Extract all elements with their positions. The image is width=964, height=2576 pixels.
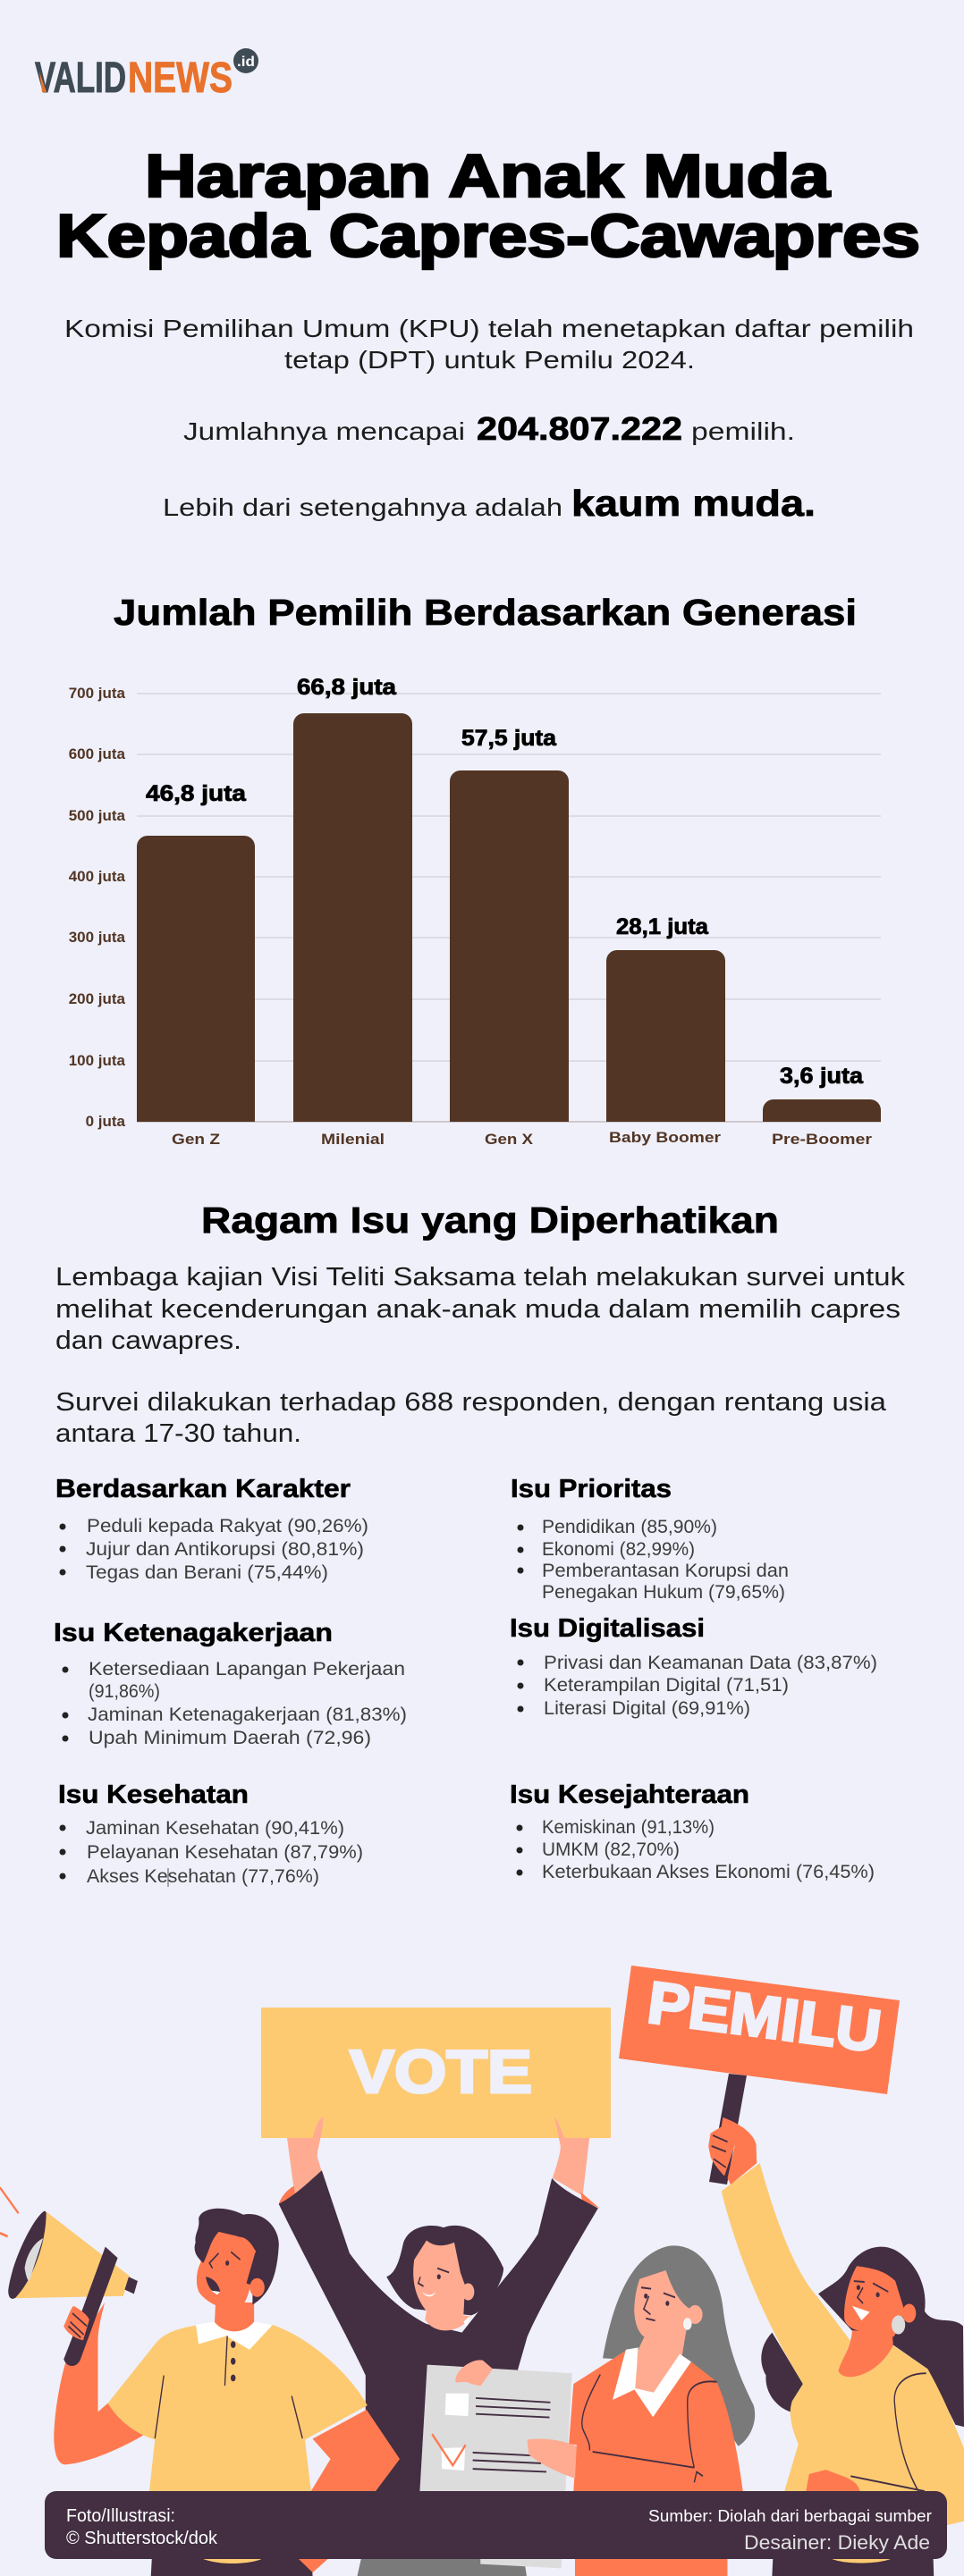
value labels: 57,5 juta <box>461 726 557 751</box>
illustration: people at election rally <box>0 1966 964 2576</box>
panel: berdasarkan karakter: Peduli kepada Rakyat (90,26%) <box>87 1516 368 1536</box>
heading: jumlah pemilih: Jumlah Pemilih Berdasarkan Generasi <box>114 592 857 633</box>
photo credit: © Shutterstock/dok <box>66 2529 218 2548</box>
logo: Validnews.id: .id <box>237 55 255 70</box>
photo credit: Foto/Illustrasi: <box>66 2506 175 2526</box>
panel: isu ketenagakerjaan: (91,86%) <box>89 1681 160 1702</box>
panel: berdasarkan karakter: Jujur dan Antikorupsi (80,81%) <box>86 1539 364 1560</box>
value labels <box>146 675 864 1089</box>
intro text block: Jumlahnya mencapai <box>183 417 465 445</box>
sign: VOTE <box>261 2008 611 2138</box>
survey description text: Survei dilakukan terhadap 688 responden, dengan rentang usia <box>55 1388 887 1417</box>
panel: isu kesejahteraan: Kemiskinan (91,13%) <box>542 1817 715 1838</box>
panel: isu kesejahteraan <box>510 1780 875 1882</box>
logo: Validnews.id: NEWS <box>128 55 233 102</box>
category labels: Pre-Boomer <box>772 1131 872 1148</box>
intro text block: pemilih. <box>691 417 795 445</box>
panel: isu prioritas: Pendidikan (85,90%) <box>542 1517 717 1537</box>
intro text block: tetap (DPT) untuk Pemilu 2024. <box>284 346 695 374</box>
intro text block <box>64 315 914 524</box>
y axis labels: 500 juta <box>69 807 126 824</box>
panel: isu prioritas: Penegakan Hukum (79,65%) <box>542 1582 785 1603</box>
source and designer credit: Desainer: Dieky Ade <box>744 2531 930 2554</box>
panel: berdasarkan karakter: Berdasarkan Karakter <box>55 1475 351 1503</box>
intro text block: 204.807.222 <box>477 410 682 447</box>
logo: Validnews.id: VALID <box>35 55 126 102</box>
source and designer credit <box>648 2507 932 2554</box>
y axis labels: 300 juta <box>69 929 126 946</box>
category labels: Milenial <box>321 1131 385 1148</box>
panel: isu digitalisasi: Privasi dan Keamanan Data (83,87%) <box>544 1653 877 1673</box>
panel: isu ketenagakerjaan: Isu Ketenagakerjaan <box>54 1619 333 1647</box>
intro text block: kaum muda. <box>571 483 816 524</box>
sign: VOTE: VOTE <box>350 2038 532 2106</box>
panel: isu kesehatan <box>58 1780 363 1887</box>
caption bar <box>45 2491 947 2559</box>
panel: isu ketenagakerjaan <box>54 1619 407 1748</box>
lower bodies below caption bar <box>151 2547 934 2576</box>
panel: isu kesehatan: Jaminan Kesehatan (90,41%) <box>86 1818 344 1839</box>
panel: isu ketenagakerjaan: Upah Minimum Daerah (72,96) <box>89 1728 371 1748</box>
bar chart: pemilih per generasi <box>69 675 881 1148</box>
y axis labels: 400 juta <box>69 868 126 885</box>
panel: isu kesejahteraan: Isu Kesejahteraan <box>510 1780 749 1809</box>
survey description text: melihat kecenderungan anak-anak muda dalam memilih capres <box>55 1295 901 1324</box>
survey description text: Lembaga kajian Visi Teliti Saksama telah melakukan survei untuk <box>55 1263 906 1292</box>
value labels: 46,8 juta <box>146 781 247 806</box>
intro text block: Komisi Pemilihan Umum (KPU) telah menetapkan daftar pemilih <box>64 315 914 342</box>
y axis labels: 100 juta <box>69 1052 126 1069</box>
panel: isu digitalisasi: Isu Digitalisasi <box>510 1614 705 1643</box>
panel: isu kesejahteraan: Keterbukaan Akses Ekonomi (76,45%) <box>542 1862 875 1882</box>
panel: isu prioritas: Pemberantasan Korupsi dan <box>542 1561 789 1581</box>
panel: isu kesehatan: Akses Kesehatan (77,76%) <box>87 1866 319 1887</box>
panel: isu digitalisasi: Keterampilan Digital (71,51) <box>544 1675 789 1696</box>
panel: isu digitalisasi: Literasi Digital (69,91%) <box>544 1698 750 1719</box>
intro text block: Lebih dari setengahnya adalah <box>163 493 562 521</box>
title <box>56 142 920 270</box>
sign: PEMILU <box>619 1966 900 2185</box>
y axis labels: 700 juta <box>69 685 126 702</box>
panel: isu kesejahteraan: UMKM (82,70%) <box>542 1839 680 1860</box>
panel: berdasarkan karakter: Tegas dan Berani (75,44%) <box>86 1562 328 1583</box>
y axis labels <box>69 685 126 1130</box>
y axis labels: 200 juta <box>69 990 126 1007</box>
panel: isu prioritas <box>511 1475 789 1603</box>
logo: Validnews.id <box>35 48 258 102</box>
title: Harapan Anak Muda <box>145 142 831 210</box>
panel: isu kesehatan: Isu Kesehatan <box>58 1780 249 1809</box>
panel: isu digitalisasi <box>510 1614 877 1719</box>
title: Kepada Capres-Cawapres <box>56 202 920 270</box>
survey description text <box>55 1263 906 1448</box>
sign: PEMILU: PEMILU <box>644 1968 885 2065</box>
person: woman with raised arm holding PEMILU sign <box>708 2117 964 2525</box>
bars <box>137 713 881 1122</box>
panel: isu prioritas: Isu Prioritas <box>511 1475 672 1503</box>
y axis labels: 600 juta <box>69 745 126 762</box>
panel: isu kesehatan: Pelayanan Kesehatan (87,79%) <box>87 1842 363 1863</box>
panel: berdasarkan karakter <box>55 1475 368 1583</box>
panel: isu ketenagakerjaan: Ketersediaan Lapangan Pekerjaan <box>89 1659 405 1679</box>
source and designer credit: Sumber: Diolah dari berbagai sumber <box>648 2507 932 2525</box>
panel: isu prioritas: Ekonomi (82,99%) <box>542 1539 695 1560</box>
person: woman with grey hair <box>528 2245 755 2491</box>
heading: ragam isu: Ragam Isu yang Diperhatikan <box>201 1200 779 1241</box>
category labels: Gen Z <box>172 1131 220 1148</box>
survey description text: dan cawapres. <box>55 1326 241 1355</box>
y axis labels: 0 juta <box>86 1113 126 1130</box>
photo credit <box>66 2506 218 2548</box>
category labels: Gen X <box>485 1131 534 1148</box>
category labels: Baby Boomer <box>609 1129 721 1146</box>
panel: isu ketenagakerjaan: Jaminan Ketenagakerjaan (81,83%) <box>88 1705 407 1725</box>
value labels: 3,6 juta <box>780 1064 864 1089</box>
survey description text: antara 17-30 tahun. <box>55 1419 301 1448</box>
category labels <box>172 1129 872 1148</box>
value labels: 66,8 juta <box>297 675 397 700</box>
person: man with megaphone <box>0 2187 400 2491</box>
person: woman in dark top holding ballot <box>279 2117 600 2568</box>
value labels: 28,1 juta <box>616 914 709 939</box>
